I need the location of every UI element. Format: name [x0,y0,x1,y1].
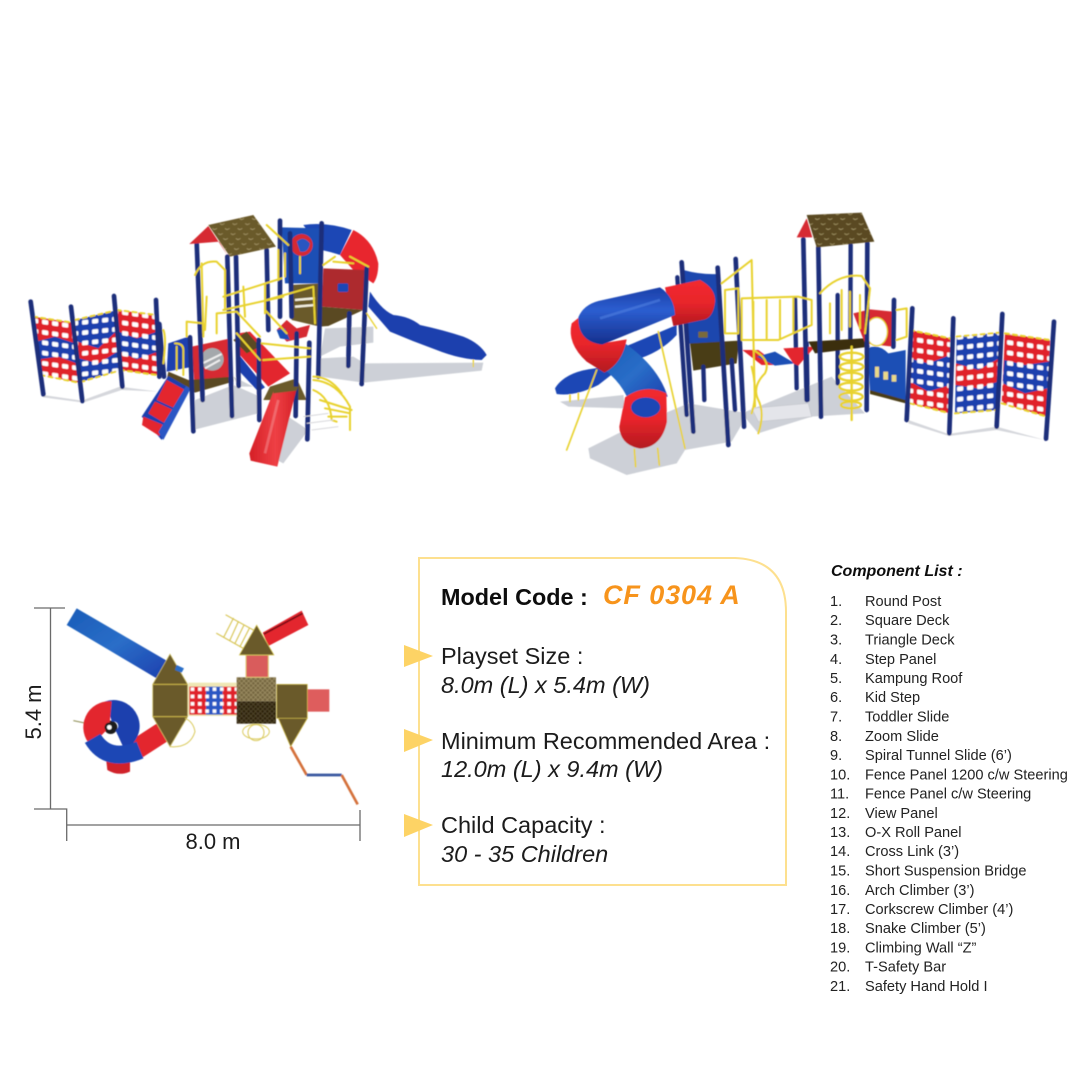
plan: fence line [291,747,358,804]
component list items: Round Post [865,594,941,610]
component list items: 18. [830,921,850,937]
plan: roof tower [237,677,276,741]
component list items: Corkscrew Climber (4’) [865,902,1013,918]
child capacity: Child Capacity : [441,812,606,838]
component list items: 10. [830,768,850,784]
child capacity: 30 - 35 Children [441,841,608,867]
plan: hexagonal deck [153,654,195,747]
component list items: 2. [830,613,842,629]
suspension bridge [742,338,870,366]
plan: top triangle deck and pink stair [239,625,274,677]
ground shadows [43,327,483,463]
component list items: 16. [830,883,850,899]
component list items: O-X Roll Panel [865,825,962,841]
spiral tunnel and blue panel [282,224,378,283]
component list items: 19. [830,940,850,956]
component list items: Zoom Slide [865,729,939,745]
plan: suspension bridge [188,683,237,716]
red toddler slide [249,387,298,467]
ground net [752,403,812,422]
step panel stairs [142,376,191,440]
component list items: 12. [830,806,850,822]
component list items: Snake Climber (5’) [865,921,986,937]
component list items: Spiral Tunnel Slide (6’) [865,748,1012,764]
red round panel [853,309,893,347]
component list items: 17. [830,902,850,918]
spiral tunnel slide [571,280,715,449]
plan drawing [67,608,358,804]
component list items: 21. [830,979,850,995]
component list items: Triangle Deck [865,632,955,648]
panel: component list [830,563,1068,995]
red panel with roll, right tower [290,268,365,327]
component list items: Toddler Slide [865,710,949,726]
component list items: 7. [830,710,842,726]
component list items: Step Panel [865,652,936,668]
minimum recommended area: Minimum Recommended Area : [441,728,770,754]
model code value: CF 0304 A [603,580,741,610]
ground shadows [560,377,1045,475]
white ground grid [303,413,338,430]
component list items: 14. [830,844,850,860]
posts [31,221,367,439]
child capacity [441,812,608,867]
minimum recommended area: 12.0m (L) x 9.4m (W) [441,756,663,782]
plan: right deck, triangle and pink step [277,684,329,747]
component list items: 9. [830,748,842,764]
plan view of playset with dimensions [21,608,360,854]
minimum recommended area [441,728,770,782]
component list items: Square Deck [865,613,950,629]
component list items: 15. [830,864,850,880]
fence panels [33,310,159,383]
dimension lines [34,608,360,841]
plan: spiral tunnel [73,711,163,774]
blue slide behind tunnel [555,325,677,394]
component list items: Arch Climber (3’) [865,883,974,899]
component list items: T-Safety Bar [865,960,946,976]
illustration: playset perspective view, slide side [31,215,487,467]
yellow rails and safety bars [163,225,368,375]
component list items: 11. [830,786,849,802]
plan: blue slide [67,608,168,678]
component list items: 20. [830,960,850,976]
yellow legs [567,332,685,467]
component list items: Kid Step [865,690,920,706]
kampung roof [189,215,276,257]
component list items [830,594,1068,995]
dimension label: width: 8.0 m [185,829,241,854]
red stair bridge [233,320,310,400]
icon: arrow minimum area [404,729,433,752]
panel: specifications [404,558,786,885]
red panel and round view window, left tower [167,337,233,393]
playset size: Playset Size : [441,643,583,669]
component list items: Safety Hand Hold I [865,979,988,995]
posts back [677,245,851,415]
yellow rails [722,260,907,433]
component list items: 3. [830,632,842,648]
component list items: 8. [830,729,842,745]
component list items: 4. [830,652,842,668]
component list items: View Panel [865,806,938,822]
component list items: Short Suspension Bridge [865,864,1026,880]
component list items: 1. [830,594,842,610]
icon: arrow child capacity [404,814,433,837]
plan: red slide and ladder [217,611,308,648]
kampung roof [797,213,874,247]
fence panels [910,330,1050,417]
component list items: Fence Panel c/w Steering [865,786,1031,802]
panel border [419,558,786,885]
icon: arrow playset size [404,645,433,667]
playset size [441,643,650,698]
component list items: 6. [830,690,842,706]
component list items: 13. [830,825,850,841]
component list items: Climbing Wall “Z” [865,940,976,956]
component list heading: Component List : [831,563,963,580]
blue zoom slide [368,292,487,360]
blue view panel and deck [868,347,906,403]
corkscrew climber [839,347,863,420]
component list items: Cross Link (3’) [865,844,959,860]
arch climber [313,313,473,430]
posts front [682,239,1054,445]
blue tower panel and deck [683,270,739,371]
playset size: 8.0m (L) x 5.4m (W) [441,672,650,698]
illustration: playset perspective view, spiral tunnel side [555,213,1054,475]
component list items: Kampung Roof [865,671,963,687]
component list items: Fence Panel 1200 c/w Steering [865,768,1068,784]
component list items: 5. [830,671,842,687]
dimension label: depth: 5.4 m [21,684,46,740]
model code label: Model Code : [441,584,588,610]
